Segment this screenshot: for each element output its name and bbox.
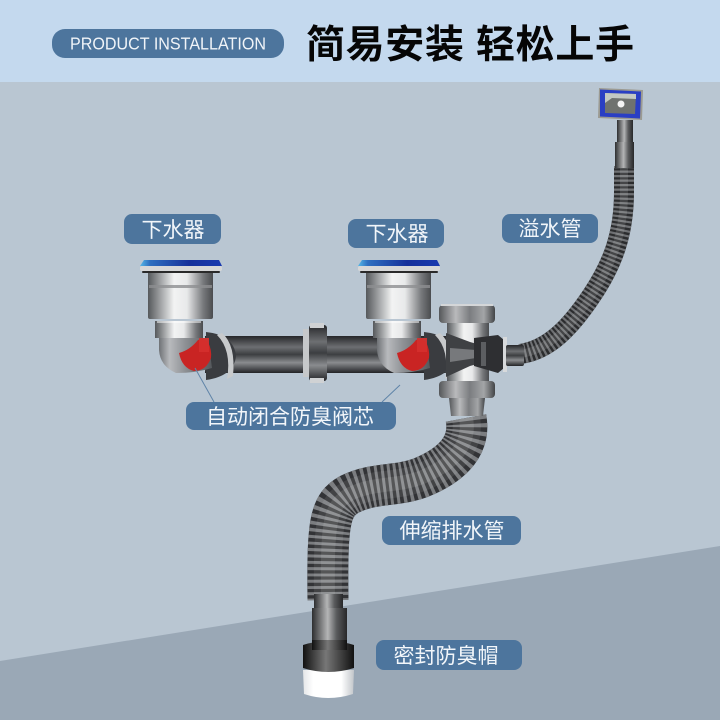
label: telescopic drain pipe: 伸缩排水管 [400,520,504,543]
label: telescopic drain pipe [382,516,521,545]
floor [0,546,720,720]
drain hose [328,418,467,600]
label: overflow pipe: 溢水管 [518,218,582,241]
header band [0,0,720,82]
label: strainer right: 下水器 [366,223,428,246]
horizontal connecting pipe [205,323,447,383]
label: odor seal cap [376,640,522,670]
odor seal cap [303,594,354,698]
title: 简易安装 轻松上手 [306,24,634,67]
leader lines [195,368,400,402]
left strainer [140,260,236,380]
overflow plate [598,88,643,168]
label: overflow pipe [502,214,598,243]
header badge: PRODUCT INSTALLATION [70,34,266,54]
header badge [52,29,284,58]
right strainer [358,260,454,380]
label: valve core [186,402,396,430]
label: strainer left: 下水器 [142,219,204,242]
label: strainer right [348,219,444,248]
label: valve core: 自动闭合防臭阀芯 [206,406,374,429]
label: odor seal cap: 密封防臭帽 [394,645,498,668]
tee junction [439,304,524,416]
overflow hose [520,166,624,354]
label: strainer left [124,214,221,244]
